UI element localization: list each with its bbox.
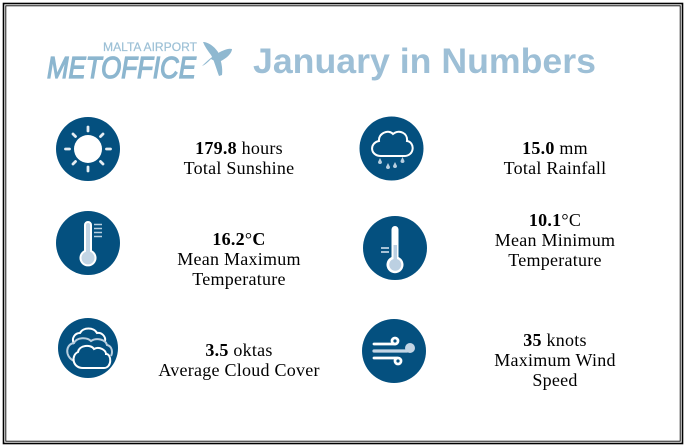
text: total sunshine	[184, 138, 294, 178]
text: total sunshine: 179.8 hours	[195, 138, 283, 158]
text: total rainfall	[504, 138, 606, 178]
icon: sun	[56, 117, 120, 181]
logo: Malta Airport Met Office: METOFFICE	[47, 50, 196, 85]
icon: thermometer, maximum	[56, 211, 120, 275]
title: January in Numbers	[253, 42, 596, 81]
text: total sunshine: Total Sunshine	[184, 158, 294, 178]
text: maximum wind speed: 35 knots	[523, 330, 587, 350]
text: total rainfall: 15.0 mm	[522, 138, 588, 158]
text: mean maximum temperature: Temperature	[192, 269, 286, 289]
text: maximum wind speed: Maximum Wind	[494, 350, 616, 370]
text: total rainfall: Total Rainfall	[504, 158, 606, 178]
icon: clouds	[58, 318, 118, 378]
text: maximum wind speed	[494, 330, 616, 390]
text: average cloud cover: Average Cloud Cover	[158, 360, 320, 380]
text: maximum wind speed: Speed	[532, 370, 578, 390]
text: average cloud cover	[158, 340, 320, 380]
text: mean minimum temperature: Mean Minimum	[495, 230, 615, 250]
text: mean maximum temperature: 16.2°C	[212, 229, 266, 249]
icon: wind	[362, 319, 426, 383]
logo: Malta Airport Met Office: MALTA AIRPORT	[103, 40, 198, 54]
text: mean minimum temperature: Temperature	[508, 250, 602, 270]
text: mean minimum temperature: 10.1°C	[529, 210, 581, 230]
text: mean maximum temperature: Mean Maximum	[177, 249, 301, 269]
text: mean minimum temperature	[495, 210, 615, 270]
text: mean maximum temperature	[177, 229, 301, 289]
icon: thermometer, minimum	[363, 216, 427, 280]
icon: rain cloud	[360, 116, 424, 180]
text: average cloud cover: 3.5 oktas	[205, 340, 273, 360]
